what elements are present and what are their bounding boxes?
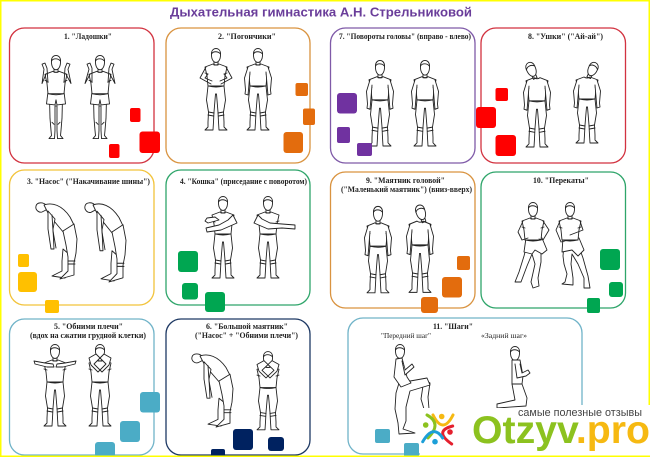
caption 9: [341, 176, 472, 194]
caption 11: «Задний шаг»: [481, 331, 527, 340]
figures 1: [42, 55, 115, 139]
squares 8: [476, 88, 516, 156]
panel: 8 Ушки: [476, 28, 626, 163]
panel: 1 Ладошки: [10, 28, 160, 163]
caption 2: 2. "Погончики": [218, 32, 276, 41]
figures 2: [200, 48, 272, 130]
caption 9: 9. "Маятник головой": [366, 176, 445, 185]
squares 2: [284, 83, 315, 153]
logo wordmark: Otzyv.pro: [472, 409, 650, 452]
caption 7: 7. "Повороты головы" (вправо - влево): [339, 32, 471, 41]
caption 4: 4. "Кошка" (приседание с поворотом): [180, 177, 307, 186]
logo: Otzyv.pro: [420, 405, 650, 456]
figures 9: [364, 204, 434, 293]
caption 5: (вдох на сжатии грудной клетки): [30, 331, 146, 340]
caption 9: ("Маленький маятник") (вниз-вверх): [341, 185, 472, 194]
caption 11: "Передний шаг": [381, 331, 431, 340]
squares 5: [95, 392, 160, 457]
caption 11: 11. "Шаги": [433, 322, 473, 331]
squares 11: [375, 429, 419, 457]
logo icon: [423, 414, 453, 445]
panel: 7 Повороты головы: [330, 28, 475, 163]
logo backing: [420, 405, 650, 456]
figures 3: [36, 203, 126, 282]
caption 10: 10. "Перекаты": [533, 176, 589, 185]
squares 10: [587, 249, 623, 313]
caption 6: 6. "Большой маятник": [206, 322, 288, 331]
panel: 9 Маятник головой: [330, 172, 475, 313]
caption 8: 8. "Ушки" ("Ай-ай"): [528, 32, 603, 41]
panel: 4 Кошка: [166, 170, 310, 312]
figure: back step: [497, 346, 530, 408]
figures 5: [34, 344, 111, 426]
caption 5: 5. "Обними плечи": [54, 322, 123, 331]
yellow frame bottom: [0, 456, 650, 457]
panel: 10 Перекаты: [481, 172, 626, 313]
figures 7: [366, 60, 438, 146]
caption 3: 3. "Насос" ("Накачивание шины"): [27, 177, 150, 186]
squares 7: [337, 93, 372, 156]
squares 1: [109, 108, 160, 158]
figures 6: [192, 352, 279, 430]
panel: 5 Обними плечи: [10, 319, 160, 457]
panel: 3 Насос: [10, 170, 154, 313]
figures 10: [515, 202, 590, 288]
squares 9: [421, 256, 470, 313]
panel: 6 Большой маятник: [166, 319, 310, 457]
panel: 2 Погончики: [166, 28, 315, 163]
caption 11: [381, 322, 527, 340]
figures 8: [524, 61, 600, 147]
figure: front step: [394, 344, 430, 434]
caption 5: [30, 322, 146, 340]
squares 3: [18, 254, 59, 313]
caption 6: [195, 322, 298, 340]
logo tagline: самые полезные отзывы: [518, 407, 642, 419]
caption 6: ("Насос" + "Обними плечи"): [195, 331, 298, 340]
title: Дыхательная гимнастика А.Н. Стрельниковой: [170, 6, 472, 20]
squares 4: [178, 251, 225, 312]
panel: 11 Шаги: [348, 318, 582, 457]
squares 6: [211, 429, 284, 457]
caption 1: 1. "Ладошки": [64, 32, 112, 41]
figures 4: [205, 196, 295, 278]
